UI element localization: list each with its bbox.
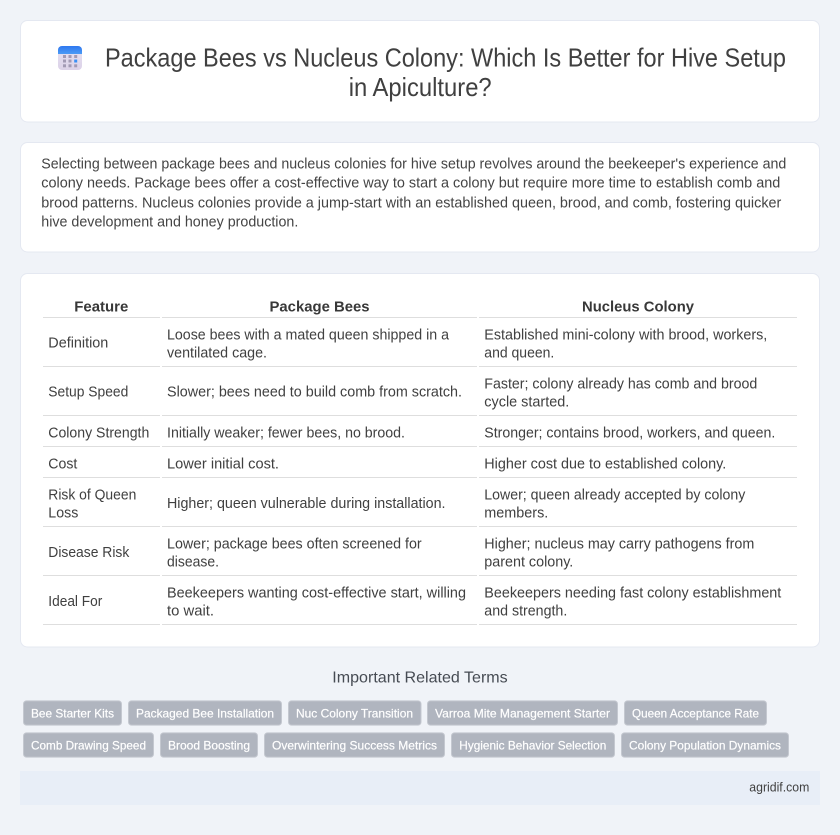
row: disease risk: parent colony. [484,554,573,570]
row: colony strength [43,425,797,447]
row: risk of queen loss: Risk of Queen [48,487,136,503]
row: cost: Lower initial cost. [167,456,279,472]
title: in Apiculture? [349,74,492,102]
row: definition [43,327,797,367]
table header row: Feature [74,299,128,316]
tag: Brood Boosting [160,733,258,757]
heading: important related terms: Important Related Terms [332,670,508,687]
row: colony strength: Initially weaker; fewer bees, no brood. [167,425,405,441]
row: definition: ventilated cage. [167,345,267,361]
tag: Hygienic Behavior Selection: Hygienic Behavior Selection [459,738,606,752]
tag: Varroa Mite Management Starter: Varroa Mite Management Starter [435,706,610,720]
tag: Varroa Mite Management Starter [428,701,618,725]
row: setup speed: Setup Speed [48,385,128,401]
text block: introduction paragraph [41,156,786,230]
tag: Overwintering Success Metrics [264,733,444,757]
row: setup speed: Slower; bees need to build comb from scratch. [167,385,462,401]
row: disease risk [43,536,797,576]
row: disease risk: disease. [167,554,219,570]
title: Package Bees vs Nucleus Colony: Which Is Better for Hive Setup [105,45,786,73]
tag: Bee Starter Kits [24,701,122,725]
row: disease risk: Higher; nucleus may carry pathogens from [484,536,754,552]
row: definition: Established mini-colony with brood, workers, [484,327,767,343]
panel: introduction [20,142,820,252]
tag: Hygienic Behavior Selection [452,733,614,757]
row: ideal for [43,585,797,625]
text block: introduction paragraph: hive development and honey production. [41,214,298,230]
row: ideal for: and strength. [484,603,567,619]
table header row [43,299,797,318]
row: setup speed: cycle started. [484,394,569,410]
text block: introduction paragraph: colony needs. Package bees offer a cost-effective way to start a colony but require more time to establish comb and [41,175,780,191]
footer credit: agridif.com [749,780,809,795]
icon: calendar [58,46,82,70]
row: risk of queen loss: members. [484,505,548,521]
text block: introduction paragraph: brood patterns. Nucleus colonies provide a jump-start with an established queen, brood, and comb, fostering quicker [41,195,781,211]
tag: Comb Drawing Speed: Comb Drawing Speed [31,738,146,752]
row: disease risk: Disease Risk [48,545,130,561]
row: ideal for: to wait. [167,603,214,619]
row: cost: Higher cost due to established colony. [484,456,726,472]
tag: Overwintering Success Metrics: Overwintering Success Metrics [272,738,437,752]
tag: Packaged Bee Installation: Packaged Bee Installation [136,706,274,720]
row: setup speed: Faster; colony already has comb and brood [484,376,757,392]
table header row: Nucleus Colony [582,299,695,316]
row: risk of queen loss: Loss [48,505,78,521]
row: ideal for: Ideal For [48,594,102,610]
row: cost [43,456,797,478]
tag: Comb Drawing Speed [24,733,154,757]
row: risk of queen loss: Higher; queen vulnerable during installation. [167,496,446,512]
tag: Bee Starter Kits: Bee Starter Kits [31,706,114,720]
tag: Colony Population Dynamics [622,733,788,757]
title [105,45,786,102]
table header row: Package Bees [270,299,370,316]
row: setup speed [43,376,797,416]
tag: Queen Acceptance Rate: Queen Acceptance Rate [632,706,759,720]
row: risk of queen loss: Lower; queen already accepted by colony [484,487,746,503]
tag: Packaged Bee Installation [128,701,282,725]
tag: Nuc Colony Transition: Nuc Colony Transition [296,706,413,720]
text block: introduction paragraph: Selecting between package bees and nucleus colonies for hive setup revolves around the beekeeper's experience and [41,156,786,172]
row: risk of queen loss [43,487,797,527]
tag: Colony Population Dynamics: Colony Population Dynamics [629,738,781,752]
tag: Brood Boosting: Brood Boosting [168,738,250,752]
row: definition: Loose bees with a mated queen shipped in a [167,327,449,343]
row: definition: Definition [48,336,108,352]
row: colony strength: Stronger; contains brood, workers, and queen. [484,425,775,441]
row: disease risk: Lower; package bees often screened for [167,536,422,552]
tag: Queen Acceptance Rate [624,701,766,725]
panel: comparison table [20,274,820,647]
row: ideal for: Beekeepers wanting cost-effective start, willing [167,585,466,601]
row: colony strength: Colony Strength [48,425,149,441]
row: definition: and queen. [484,345,554,361]
tag: Nuc Colony Transition [288,701,421,725]
tag list: related terms [24,701,788,757]
panel: title header [20,20,820,122]
row: cost: Cost [48,456,77,472]
footer bar [20,771,820,805]
row: ideal for: Beekeepers needing fast colony establishment [484,585,781,601]
